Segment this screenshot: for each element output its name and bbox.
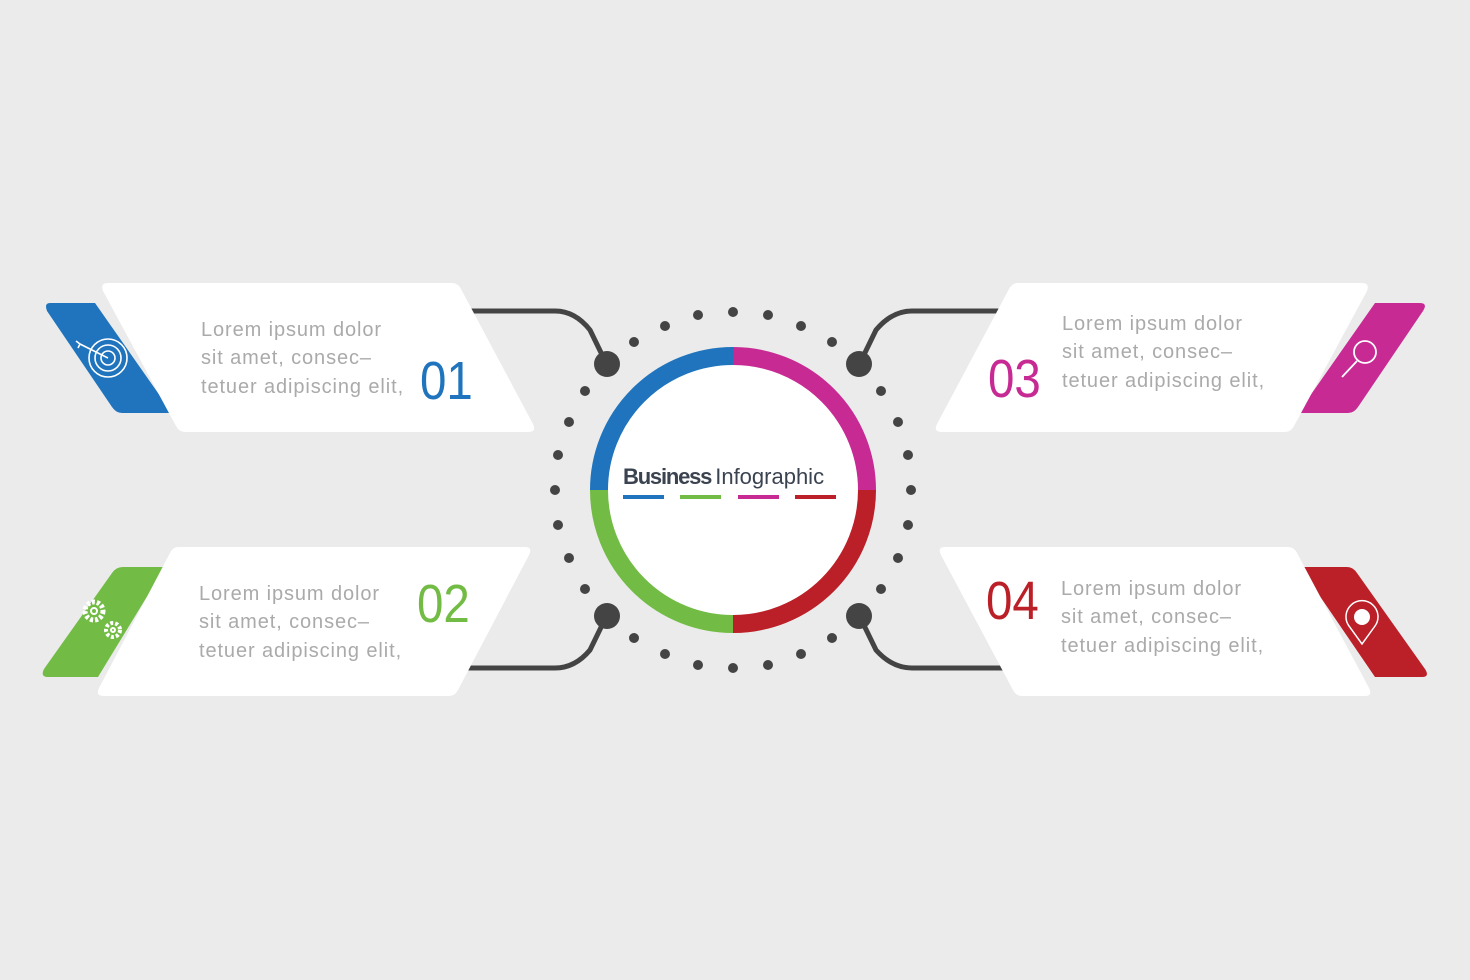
card 04: Lorem ipsum dolor xyxy=(1061,578,1242,600)
card 01: sit amet, consec– xyxy=(201,347,372,369)
card 04: sit amet, consec– xyxy=(1061,606,1232,628)
card 03: 03 xyxy=(988,348,1041,409)
card 04: tetuer adipiscing elit, xyxy=(1061,635,1264,657)
card 03: sit amet, consec– xyxy=(1062,341,1233,363)
connectors xyxy=(465,311,1005,668)
icon: magnifier xyxy=(1342,341,1376,377)
central circle xyxy=(599,356,867,624)
card 01: 01 xyxy=(420,350,473,411)
card 04: 04 xyxy=(986,570,1039,631)
dotted ring xyxy=(550,307,916,673)
icon: target xyxy=(76,339,127,377)
card 01: Lorem ipsum dolor xyxy=(201,319,382,341)
card 04 xyxy=(940,547,1427,696)
card 02 xyxy=(43,547,530,696)
card 03: tetuer adipiscing elit, xyxy=(1062,370,1265,392)
card 02: tetuer adipiscing elit, xyxy=(199,640,402,662)
card 03: Lorem ipsum dolor xyxy=(1062,313,1243,335)
title: BusinessInfographic xyxy=(623,464,824,489)
icon: gears xyxy=(85,602,120,637)
icon: map pin xyxy=(1346,601,1378,644)
card 02: 02 xyxy=(417,573,470,634)
card 02: Lorem ipsum dolor xyxy=(199,583,380,605)
card 02: sit amet, consec– xyxy=(199,611,370,633)
card 03 xyxy=(936,283,1425,432)
card 01 xyxy=(46,283,534,432)
card 01: tetuer adipiscing elit, xyxy=(201,376,404,398)
